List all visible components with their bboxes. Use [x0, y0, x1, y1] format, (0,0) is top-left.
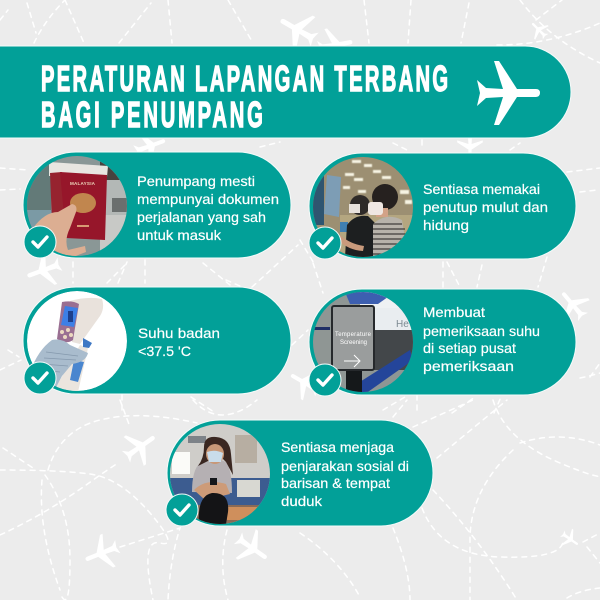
photo: screening sign — [313, 292, 413, 394]
text — [281, 439, 409, 509]
text: Sentiasa menjaga — [281, 439, 394, 455]
text: pemeriksaan — [423, 358, 514, 374]
text — [423, 304, 540, 374]
icon: check badge — [309, 227, 341, 259]
photo: screening sign: Screening — [340, 340, 367, 346]
text: penjarakan sosial di — [281, 458, 409, 474]
text: <37.5 'C — [138, 343, 191, 359]
text: barisan & tempat — [281, 475, 390, 491]
panel: body temperature — [23, 287, 291, 395]
icon: airplane — [477, 61, 540, 125]
text: perjalanan yang sah — [137, 209, 266, 225]
photo: screening sign: He — [396, 319, 409, 330]
text — [423, 181, 548, 233]
text: pemeriksaan suhu — [423, 323, 540, 339]
icon: check badge — [166, 494, 198, 526]
title: BAGI PENUMPANG — [41, 96, 263, 136]
photo: seated woman with mask — [170, 424, 270, 525]
title: PERATURAN LAPANGAN TERBANG — [41, 60, 448, 100]
text: Suhu badan — [138, 325, 220, 341]
panel: social distancing — [166, 420, 433, 526]
panel: header banner — [0, 46, 571, 138]
text: untuk masuk — [137, 227, 222, 243]
photo: passports in hand: MALAYSIA — [70, 181, 96, 186]
photo: passports in hand — [27, 156, 127, 262]
text: Penumpang mesti — [137, 173, 255, 189]
title — [41, 60, 448, 136]
text: di setiap pusat — [423, 340, 516, 356]
text: hidung — [423, 217, 469, 233]
text: Membuat — [423, 304, 485, 320]
photo: infrared thermometer — [27, 291, 127, 395]
icon: check badge — [24, 362, 56, 394]
text: penutup mulut dan — [423, 199, 548, 215]
panel: temperature screening — [309, 289, 576, 396]
panel: face mask — [309, 153, 576, 259]
text — [138, 325, 220, 359]
icon: check badge — [309, 364, 341, 396]
text: duduk — [281, 493, 323, 509]
text: Sentiasa memakai — [423, 181, 540, 197]
photo: masked travellers — [313, 157, 413, 257]
text — [137, 173, 279, 243]
panel: travel documents — [23, 152, 291, 262]
icon: check badge — [24, 226, 56, 258]
photo: screening sign: Temperature — [335, 332, 372, 338]
text: mempunyai dokumen — [137, 191, 279, 207]
